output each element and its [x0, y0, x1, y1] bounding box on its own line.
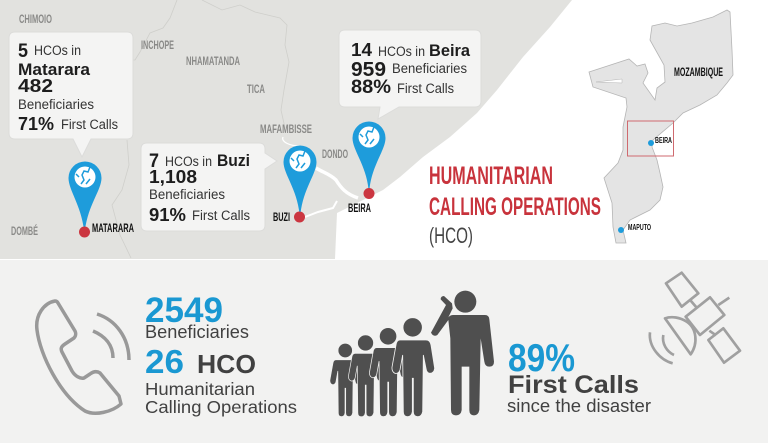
- callout: Beira: 88%: [351, 77, 391, 98]
- callout: Matarara: [9, 32, 133, 157]
- callout: Matarara: Beneficiaries: [18, 97, 94, 112]
- map labels: pinned places: BEIRA: [348, 201, 371, 215]
- map labels: towns: TICA: [247, 82, 265, 96]
- stats: first calls: since the disaster: [507, 396, 651, 416]
- stats: first calls: [507, 337, 651, 416]
- stats: first calls: First Calls: [508, 371, 639, 399]
- map labels: towns: MAFAMBISSE: [260, 122, 312, 136]
- callout: Beira: 14: [351, 40, 372, 60]
- callout: Buzi: HCOs in: [165, 154, 212, 169]
- icon: telephone: [37, 301, 129, 413]
- icon: satellite: [650, 273, 740, 363]
- callout: Beira: Beira: [429, 41, 471, 60]
- callout: Beira: First Calls: [397, 81, 454, 96]
- callout: Matarara: 482: [18, 76, 53, 96]
- map labels: towns: NHAMATANDA: [186, 54, 240, 68]
- panel: regional map: [0, 0, 768, 259]
- map labels: towns: CHIMOIO: [19, 12, 52, 26]
- callout: Beira: HCOs in: [378, 44, 425, 59]
- map: Mozambique locator: MAPUTO: [628, 223, 651, 232]
- callout: Beira: Beneficiaries: [392, 61, 467, 76]
- stats: first calls: 89%: [508, 337, 575, 380]
- callout: Beira: [339, 30, 481, 119]
- map labels: towns: [11, 12, 348, 238]
- callout: Matarara: 71%: [18, 114, 54, 134]
- callout: Buzi: 91%: [149, 205, 186, 225]
- title: HUMANITARIAN: [429, 162, 553, 190]
- callout: Buzi: Buzi: [217, 151, 250, 170]
- callout: Beira: 959: [351, 59, 386, 81]
- callout: Matarara: First Calls: [61, 117, 118, 132]
- panel: summary: [0, 260, 768, 443]
- map labels: towns: DOMBÉ: [11, 223, 38, 238]
- callout: Buzi: Beneficiaries: [149, 187, 225, 202]
- stats: beneficiaries and HCO: HCO: [197, 349, 256, 379]
- icon: map pin Matarara: [68, 162, 102, 238]
- callout: Matarara: 5: [18, 41, 28, 62]
- map: Mozambique locator: BEIRA: [655, 136, 672, 145]
- title: [429, 162, 601, 248]
- stats: beneficiaries and HCO: 2549: [145, 291, 223, 330]
- callout: Buzi: 7: [149, 151, 159, 172]
- icon: people with phone: [330, 291, 494, 417]
- stats: beneficiaries and HCO: [145, 291, 297, 417]
- callout: Buzi: [141, 143, 277, 231]
- stats: beneficiaries and HCO: Beneficiaries: [145, 322, 249, 342]
- map labels: towns: INCHOPE: [141, 38, 174, 52]
- map: Mozambique locator: [589, 10, 733, 243]
- callout: Matarara: HCOs in: [34, 43, 81, 58]
- map labels: towns: DONDO: [322, 147, 348, 161]
- stats: beneficiaries and HCO: Calling Operations: [145, 397, 297, 417]
- callout: Buzi: 1,108: [149, 167, 197, 187]
- stats: beneficiaries and HCO: Humanitarian: [145, 379, 255, 399]
- title: (HCO): [429, 223, 473, 248]
- map labels: pinned places: MATARARA: [92, 221, 134, 235]
- map labels: pinned places: [92, 201, 371, 235]
- map labels: pinned places: BUZI: [273, 210, 290, 224]
- stats: beneficiaries and HCO: 26: [145, 343, 184, 380]
- callout: Buzi: First Calls: [192, 208, 250, 223]
- title: CALLING OPERATIONS: [429, 193, 601, 221]
- callout: Matarara: Matarara: [18, 60, 91, 79]
- icon: map pin Beira: [352, 122, 386, 199]
- map: Mozambique locator: MOZAMBIQUE: [674, 65, 723, 79]
- icon: map pin Buzi: [284, 146, 316, 222]
